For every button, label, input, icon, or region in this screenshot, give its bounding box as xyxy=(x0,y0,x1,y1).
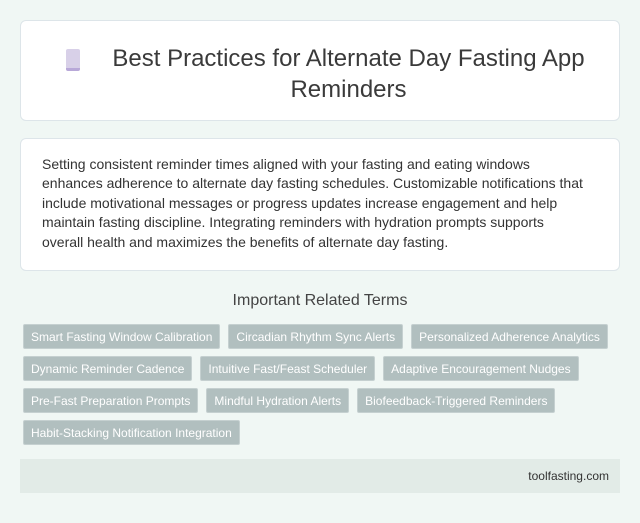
heading: related terms: Important Related Terms xyxy=(233,292,407,309)
description text: Setting consistent reminder times aligned with your fasting and eating windows enhances adherence to alternate day fasting schedules. Customizable notifications that include motivational messages or progress updates increase engagement and help maintain fasting discipline. Integrating reminders with hydration prompts supports overall health and maximizes the benefits of alternate day fasting. xyxy=(42,156,583,250)
tags: Biofeedback-Triggered Reminders xyxy=(365,394,547,408)
tags: Mindful Hydration Alerts xyxy=(214,394,341,408)
tags: Intuitive Fast/Feast Scheduler xyxy=(208,362,367,376)
description card xyxy=(20,138,620,271)
tags: Adaptive Encouragement Nudges xyxy=(391,362,571,376)
tags: Smart Fasting Window Calibration xyxy=(31,330,212,344)
footer: toolfasting.com xyxy=(528,469,609,483)
tags: Habit-Stacking Notification Integration xyxy=(31,426,232,440)
icon: document xyxy=(66,49,80,71)
tags: Dynamic Reminder Cadence xyxy=(31,362,184,376)
header card xyxy=(20,20,620,121)
tags: Pre-Fast Preparation Prompts xyxy=(31,394,190,408)
title: Best Practices for Alternate Day Fasting App Reminders xyxy=(112,45,585,103)
tags: Personalized Adherence Analytics xyxy=(419,330,600,344)
tags: Circadian Rhythm Sync Alerts xyxy=(236,330,395,344)
tags xyxy=(23,324,608,445)
footer xyxy=(20,459,620,493)
